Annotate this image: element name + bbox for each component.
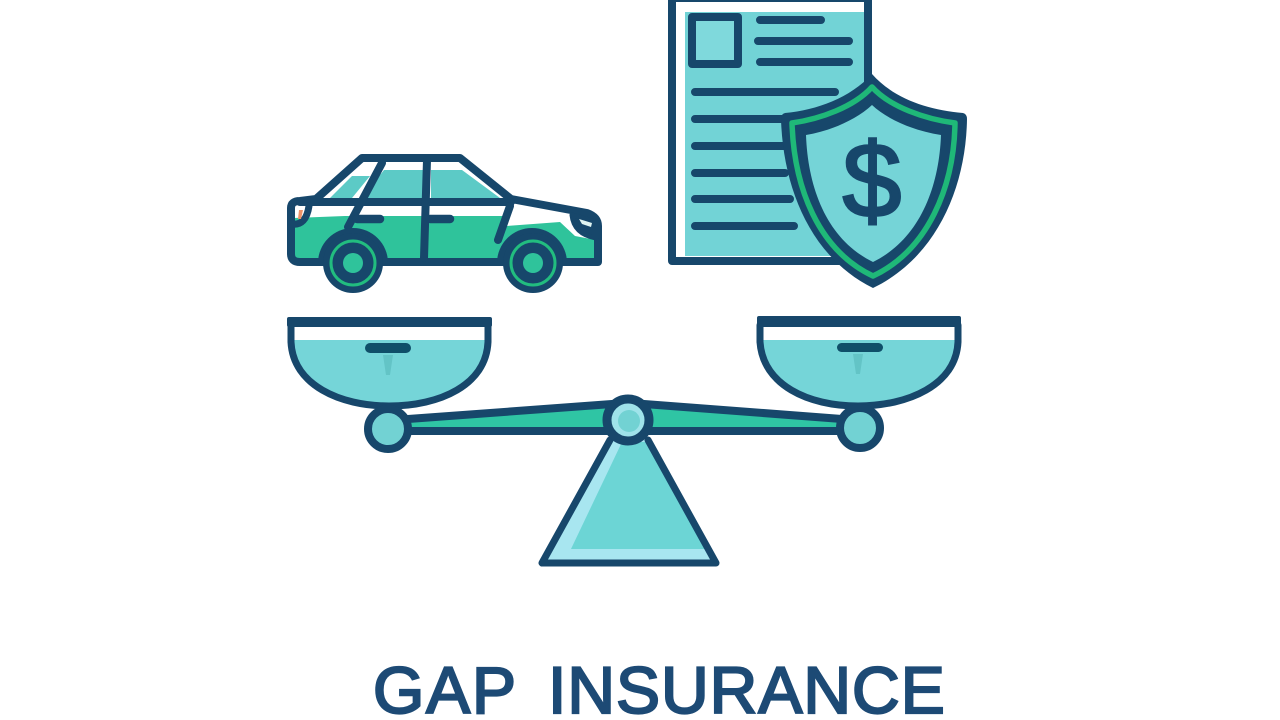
left pan (287, 317, 492, 406)
car body fill (294, 205, 596, 260)
front wheel (497, 228, 567, 293)
document photo box (692, 17, 738, 64)
right pan (757, 316, 961, 406)
icon: policy document (672, 0, 868, 261)
center pivot (607, 399, 649, 441)
icon: balance scale (287, 316, 961, 563)
car outline (291, 158, 598, 262)
fulcrum (542, 440, 716, 563)
dollar sign: $ (843, 122, 901, 240)
icon: shield with dollar (781, 74, 967, 288)
document text lines (695, 20, 849, 226)
car lights (298, 210, 303, 219)
left joint (368, 409, 408, 449)
beam (400, 404, 850, 431)
icon: car (291, 158, 598, 293)
car windows (328, 161, 502, 198)
right joint (840, 408, 880, 448)
document sheet (672, 0, 868, 261)
rear wheel (318, 228, 388, 293)
